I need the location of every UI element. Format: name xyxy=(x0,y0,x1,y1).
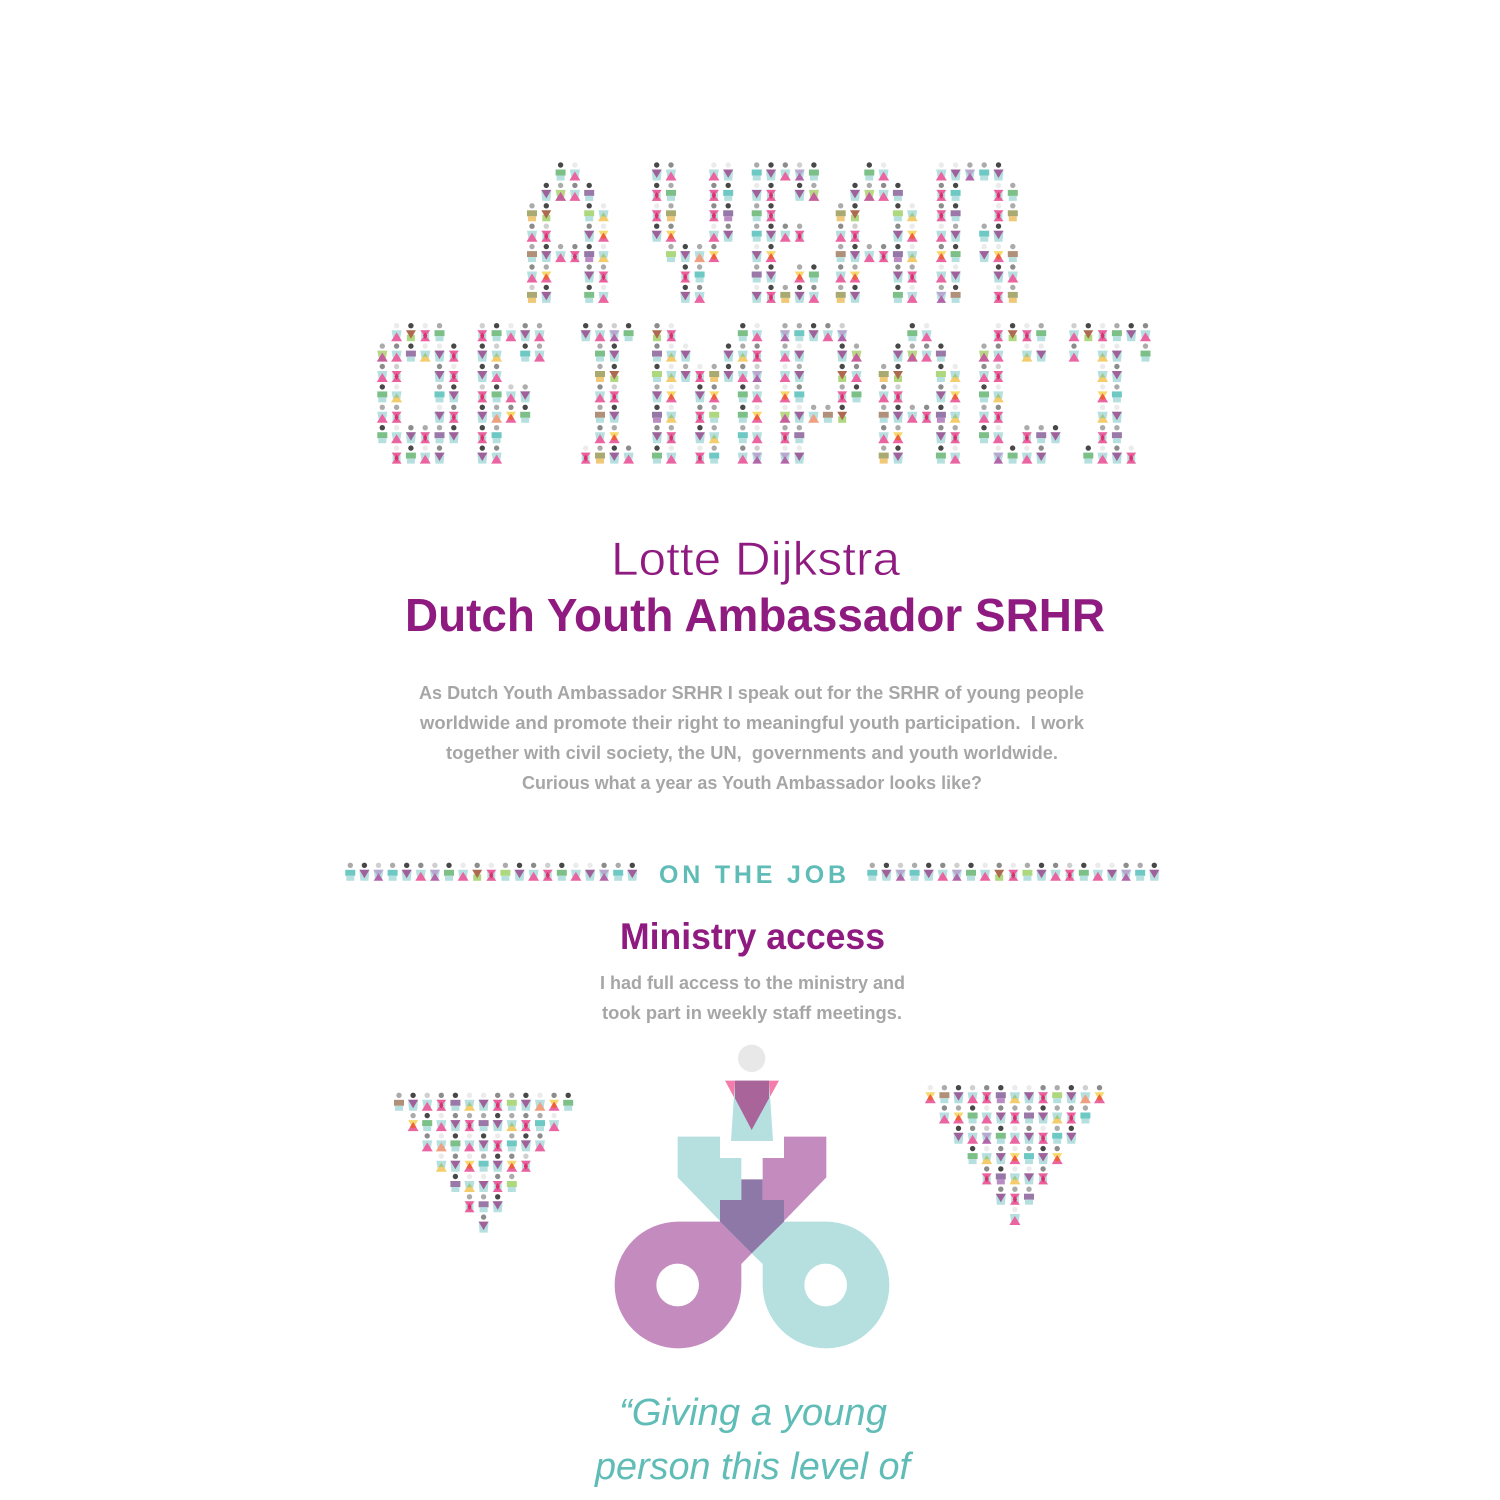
name: Lotte Dijkstra: Lotte Dijkstra xyxy=(611,532,901,585)
right arm purple xyxy=(763,1137,826,1221)
intro paragraph: worldwide and promote their right to meaningful youth participation. I work xyxy=(419,712,1085,733)
title line 2 letter P xyxy=(780,323,862,464)
right loop teal xyxy=(752,1222,889,1348)
figure ribbon left xyxy=(345,863,637,881)
overlap of arms xyxy=(720,1179,784,1253)
quote xyxy=(594,1392,913,1488)
title line 1 letter Y xyxy=(652,162,733,303)
ministry text block xyxy=(600,972,905,1023)
title line 2 letter T xyxy=(1068,323,1151,464)
heading: Ministry access: Ministry access xyxy=(620,916,885,957)
title line 2 letter O xyxy=(377,323,459,464)
left arm teal xyxy=(678,1137,741,1221)
figure triangle left xyxy=(394,1093,573,1233)
title: A YEAR OF IMPACT, drawn from small figures xyxy=(377,162,1151,464)
quote: “Giving a young xyxy=(619,1392,887,1434)
central figure: person with arms and linked loops xyxy=(615,1045,889,1348)
title line 2 letter I xyxy=(581,323,634,464)
title line 1 letter A second xyxy=(835,162,918,303)
title line 1 letter R xyxy=(936,162,1018,303)
intro paragraph: Curious what a year as Youth Ambassador looks like? xyxy=(522,772,982,793)
quote: person this level of xyxy=(594,1446,913,1488)
title line 2 letter C xyxy=(978,323,1060,464)
title line 2 letter A xyxy=(878,323,961,464)
intro paragraph: As Dutch Youth Ambassador SRHR I speak out for the SRHR of young people xyxy=(419,682,1084,703)
title line 1 letter E xyxy=(752,162,819,303)
title line 2 letter M xyxy=(652,323,763,464)
ministry text block: I had full access to the ministry and xyxy=(600,972,905,993)
figure triangle right xyxy=(925,1085,1105,1225)
subtitle: Dutch Youth Ambassador SRHR: Dutch Youth Ambassador SRHR xyxy=(405,589,1105,641)
intro paragraph: together with civil society, the UN, governments and youth worldwide. xyxy=(446,742,1058,763)
section label: ON THE JOB: ON THE JOB xyxy=(659,861,846,889)
title line 1 letter A xyxy=(526,162,609,303)
ministry text block: took part in weekly staff meetings. xyxy=(602,1002,902,1023)
title line 2 letter F xyxy=(477,323,545,464)
torso xyxy=(725,1081,779,1141)
left loop purple xyxy=(615,1222,752,1348)
head xyxy=(738,1045,765,1072)
figure ribbon right xyxy=(867,863,1159,881)
intro paragraph xyxy=(419,682,1085,793)
